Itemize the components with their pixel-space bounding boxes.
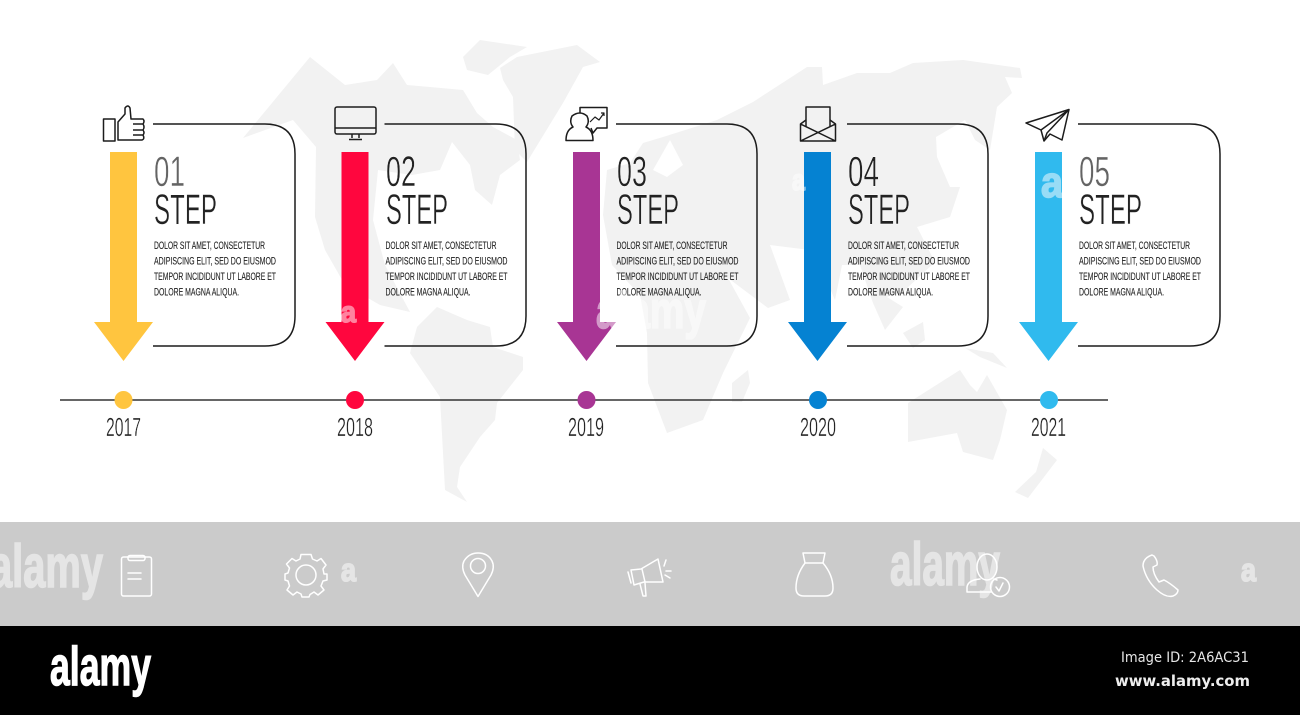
timeline: 2021 xyxy=(1031,414,1066,442)
icon: gear xyxy=(285,554,327,597)
card outline 2 xyxy=(384,124,526,346)
body text 5 xyxy=(1079,240,1201,298)
world map background xyxy=(243,40,1057,502)
body text 2: TEMPOR INCIDIDUNT UT LABORE ET xyxy=(386,271,508,283)
arrow 5 xyxy=(1019,152,1078,361)
watermarks on chart: a xyxy=(792,164,805,197)
card outline 3 xyxy=(616,124,757,346)
body text 1 xyxy=(154,240,276,298)
body text 1: ADIPISCING ELIT, SED DO EIUSMOD xyxy=(154,256,276,268)
body text 4 xyxy=(848,240,970,298)
step 5 xyxy=(1019,110,1220,361)
step number 05: 05 xyxy=(1079,148,1110,196)
arrow 4 xyxy=(788,152,847,361)
body text 2: ADIPISCING ELIT, SED DO EIUSMOD xyxy=(386,256,508,268)
step label: STEP xyxy=(386,186,448,234)
timeline xyxy=(60,391,1108,442)
icon: location pin xyxy=(463,553,493,596)
watermarks on band: alamy xyxy=(890,531,1000,598)
step label: STEP xyxy=(848,186,910,234)
icon: money bag xyxy=(796,553,833,596)
body text 3: DOLOR SIT AMET, CONSECTETUR xyxy=(616,240,728,252)
image id: Image ID: 2A6AC31 xyxy=(1121,650,1249,666)
step label: STEP xyxy=(1079,186,1142,234)
body text 1: DOLORE MAGNA ALIQUA. xyxy=(154,286,239,298)
body text 1: DOLOR SIT AMET, CONSECTETUR xyxy=(154,240,265,252)
watermarks on band: a xyxy=(1241,552,1256,588)
body text 3: TEMPOR INCIDIDUNT UT LABORE ET xyxy=(616,271,739,283)
timeline: 2020 xyxy=(800,414,836,442)
step 2 xyxy=(326,107,526,361)
icon: monitor xyxy=(335,107,376,140)
bottom grey band xyxy=(0,522,1300,626)
body text 2 xyxy=(386,240,508,298)
icon: phone xyxy=(1143,555,1178,596)
step 3 xyxy=(557,108,757,361)
timeline: 2018 xyxy=(337,414,373,442)
timeline: 2019 xyxy=(568,414,604,442)
card outline 5 xyxy=(1078,124,1220,346)
body text 3 xyxy=(616,240,739,298)
step 1 xyxy=(94,106,295,361)
body text 5: DOLORE MAGNA ALIQUA. xyxy=(1079,286,1164,298)
icon: envelope xyxy=(800,107,836,141)
body text 4: DOLOR SIT AMET, CONSECTETUR xyxy=(848,240,959,252)
body text 5: TEMPOR INCIDIDUNT UT LABORE ET xyxy=(1079,271,1201,283)
body text 3: DOLORE MAGNA ALIQUA. xyxy=(616,286,702,298)
icon: thumbs up xyxy=(104,106,144,141)
body text 2: DOLOR SIT AMET, CONSECTETUR xyxy=(386,240,497,252)
arrow 1 xyxy=(94,152,153,361)
icon: user with check xyxy=(967,554,1010,596)
website: www.alamy.com xyxy=(1115,672,1250,690)
body text 5: DOLOR SIT AMET, CONSECTETUR xyxy=(1079,240,1190,252)
card outline 1 xyxy=(153,124,295,346)
watermarks on chart: a xyxy=(1041,158,1063,207)
body text 4: DOLORE MAGNA ALIQUA. xyxy=(848,286,933,298)
icon: clipboard xyxy=(122,556,152,596)
body text 4: TEMPOR INCIDIDUNT UT LABORE ET xyxy=(848,271,970,283)
step number 04: 04 xyxy=(848,148,879,196)
icon: paper plane xyxy=(1026,110,1069,141)
icon: megaphone xyxy=(628,559,671,596)
body text 1: TEMPOR INCIDIDUNT UT LABORE ET xyxy=(154,271,276,283)
timeline: 2017 xyxy=(106,414,141,442)
body text 4: ADIPISCING ELIT, SED DO EIUSMOD xyxy=(848,256,970,268)
alamy logo: alamy xyxy=(50,635,151,697)
step number 01: 01 xyxy=(154,148,185,196)
watermarks on chart: alamy xyxy=(596,282,706,340)
watermarks on chart: a xyxy=(341,296,356,329)
arrow 3 xyxy=(557,152,616,361)
body text 5: ADIPISCING ELIT, SED DO EIUSMOD xyxy=(1079,256,1201,268)
body text 3: ADIPISCING ELIT, SED DO EIUSMOD xyxy=(616,256,739,268)
body text 2: DOLORE MAGNA ALIQUA. xyxy=(386,286,470,298)
arrow 2 xyxy=(326,152,384,361)
watermarks on band xyxy=(0,531,1256,600)
card outline 4 xyxy=(847,124,988,346)
step label: STEP xyxy=(154,186,217,234)
step number 02: 02 xyxy=(386,148,416,196)
step number 03: 03 xyxy=(617,148,647,196)
watermarks on band: a xyxy=(341,552,356,588)
step 4 xyxy=(788,107,988,361)
icon: presenter with chart xyxy=(566,108,607,140)
black footer xyxy=(0,626,1300,715)
watermarks on chart xyxy=(341,158,1063,340)
step label: STEP xyxy=(617,186,679,234)
